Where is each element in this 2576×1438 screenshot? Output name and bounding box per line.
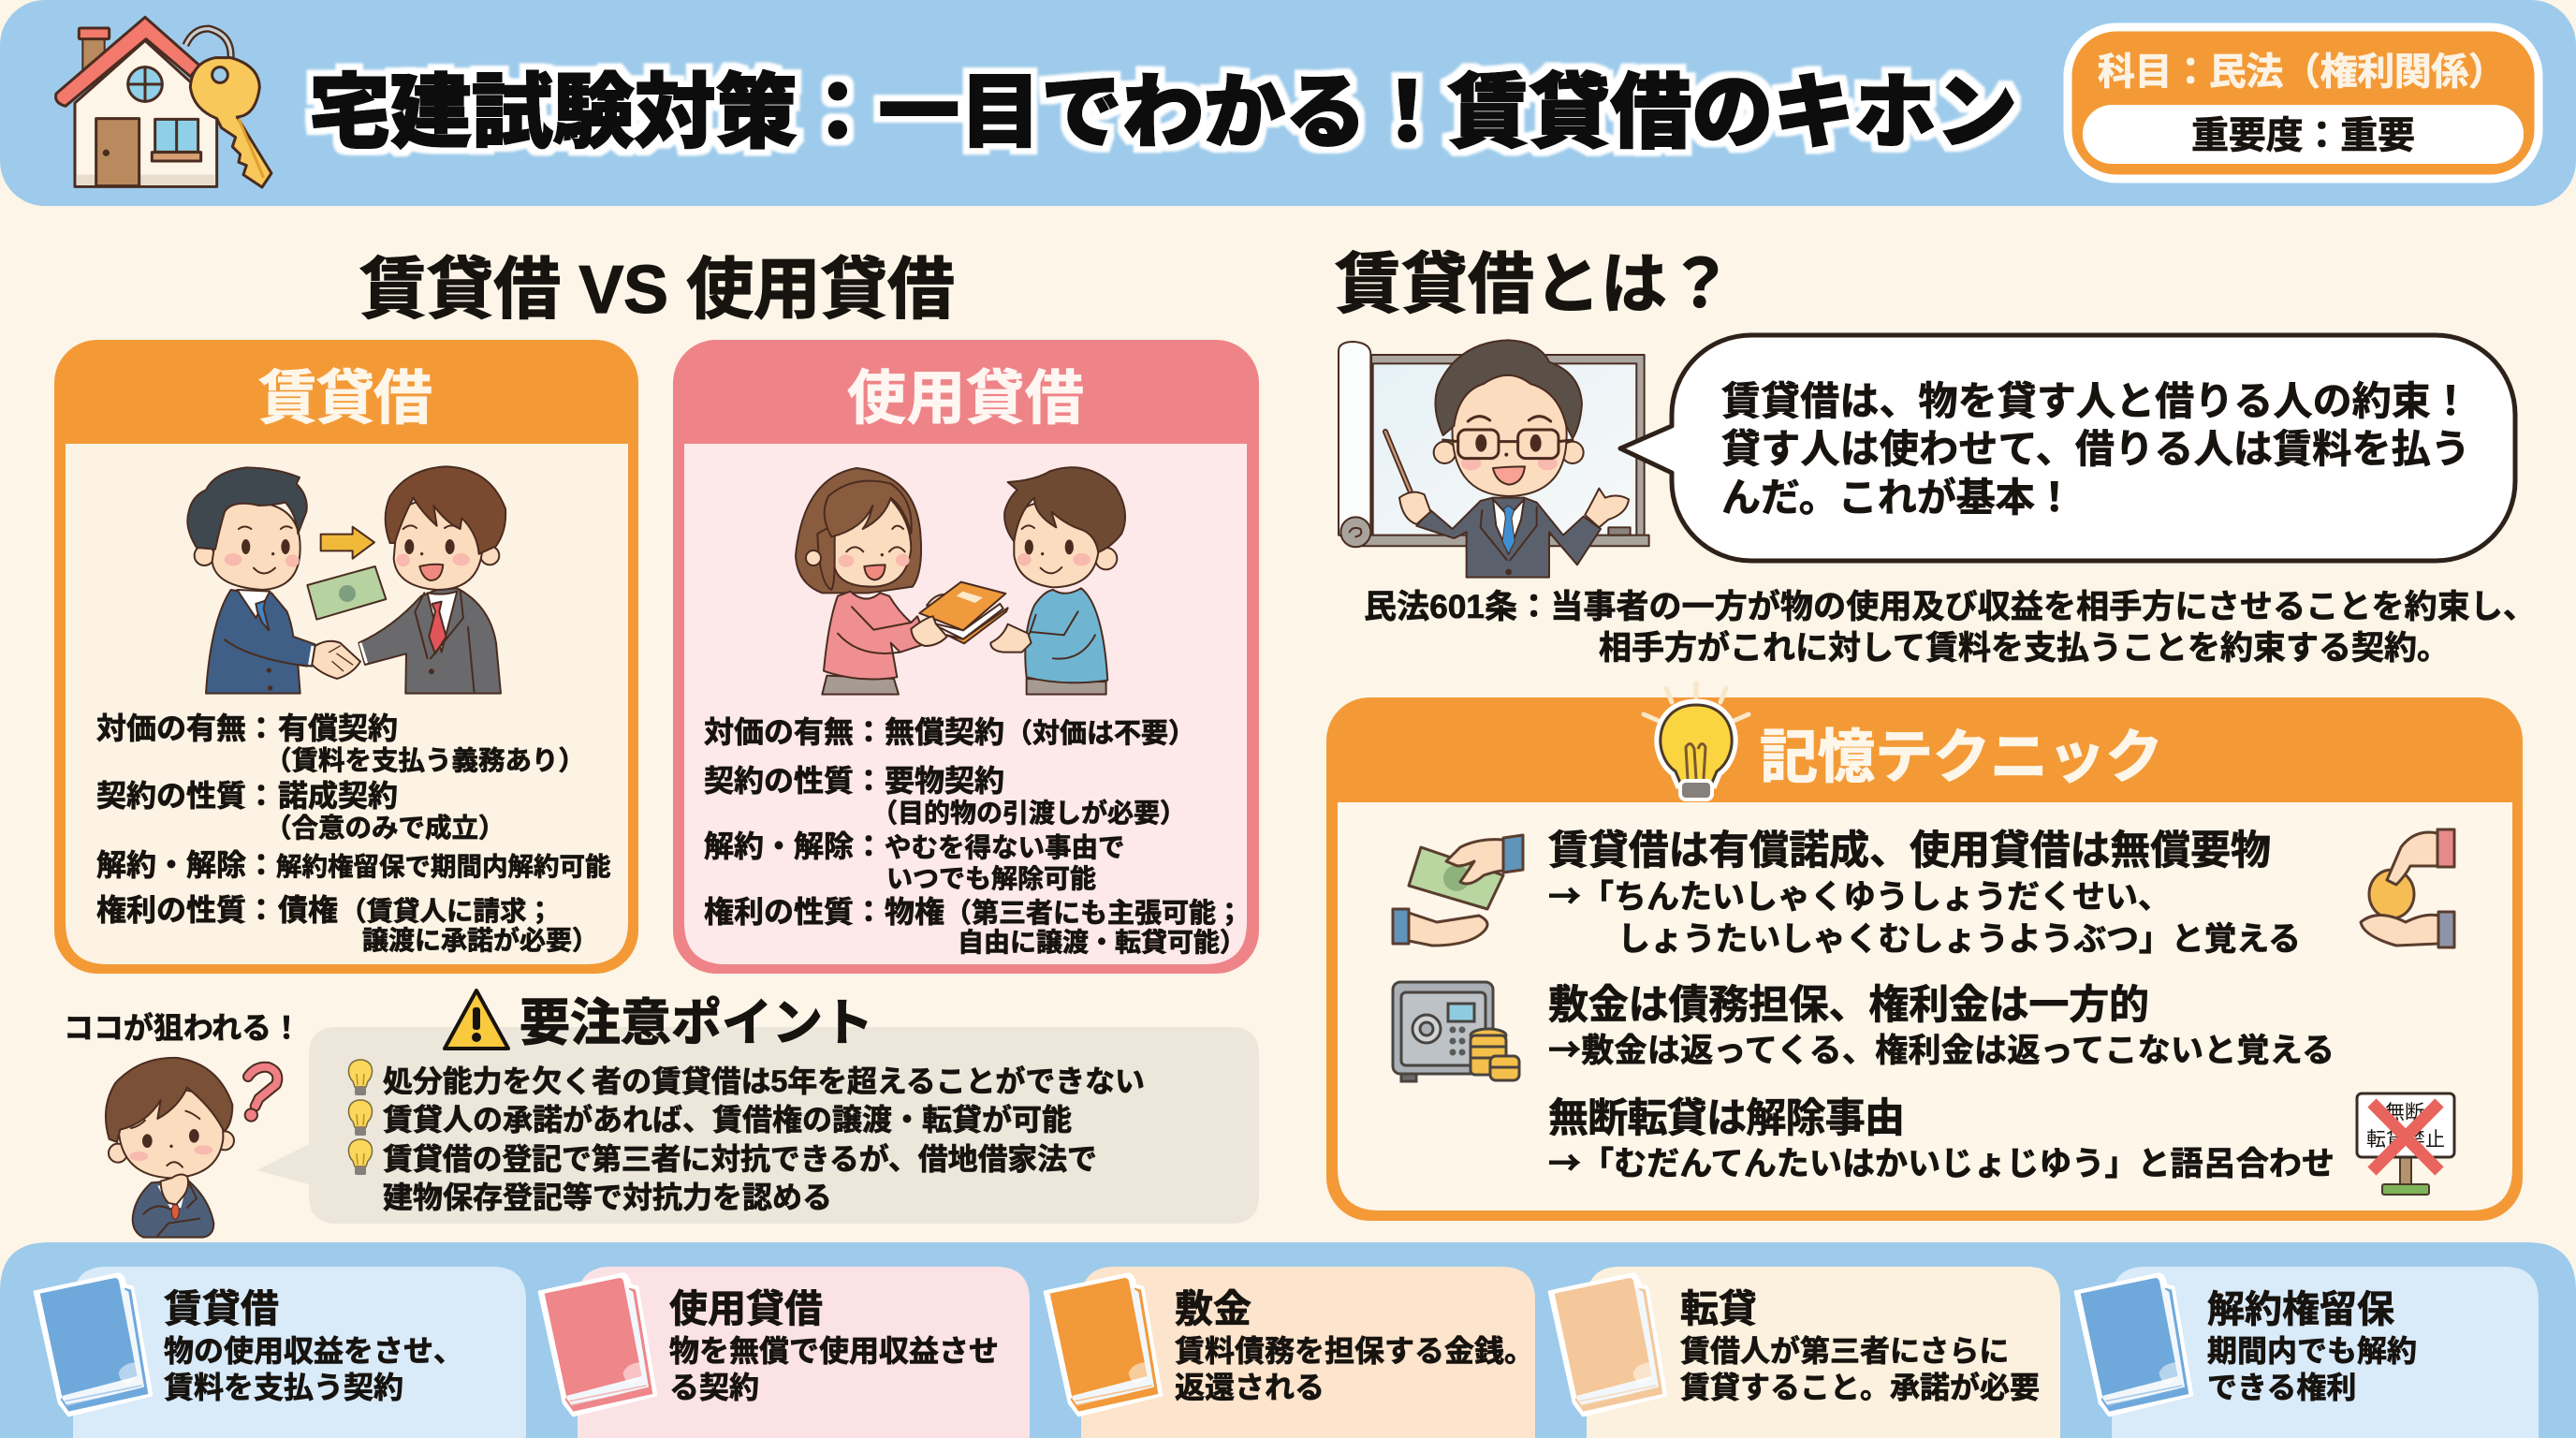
card facts: 契約の性質：: [96, 779, 276, 813]
icon: coin handover: [2361, 829, 2454, 947]
glossary card: 敷金: [1045, 1267, 1535, 1438]
technique lines: 無断転貸は解除事由: [1548, 1096, 1905, 1141]
card facts: （賃貸人に請求；: [340, 897, 553, 927]
card facts: （第三者にも主張可能；: [944, 898, 1243, 929]
card facts: 要物契約: [885, 764, 1004, 798]
glossary card: 賃貸借: 賃料を支払う契約: [164, 1371, 403, 1404]
card facts: 物権: [885, 895, 944, 929]
card facts: 対価の有無：: [704, 715, 884, 749]
speech bubble: 賃貸借は、物を貸す人と借りる人の約束！: [1721, 379, 2470, 423]
glossary band: [0, 1242, 2576, 1438]
glossary card: 転貸: 賃貸すること。承諾が必要: [1680, 1371, 2040, 1404]
glossary card: 使用貸借: る契約: [669, 1371, 759, 1404]
icon: cash handover: [1393, 835, 1523, 946]
panel: 使用貸借 card: [673, 340, 1259, 974]
civil code article 601: 民法601条：当事者の一方が物の使用及び収益を相手方にさせることを約束し、: [1364, 589, 2536, 625]
glossary card: 敷金: 賃料債務を担保する金銭。: [1175, 1334, 1534, 1368]
card facts: いつでも解除可能: [886, 864, 1096, 893]
panel: memory technique: [1326, 683, 2523, 1221]
card facts: 権利の性質：: [704, 895, 884, 929]
panel: caution points: [64, 990, 1259, 1238]
panel heading: 記憶テクニック: [1760, 726, 2163, 790]
card facts: 債権: [278, 893, 338, 927]
icon: safe with coins: [1393, 982, 1519, 1081]
card facts: 解約・解除：: [96, 848, 276, 882]
speech bubble: [1620, 335, 2515, 561]
card facts: （合意のみで成立）: [265, 814, 505, 844]
caution bullets: 処分能力を欠く者の賃貸借は5年を超えることができない: [383, 1064, 1145, 1098]
card facts: [96, 712, 610, 955]
glossary card: 解約権留保: 期間内でも解約: [2207, 1334, 2417, 1368]
icon: warning triangle: [445, 990, 508, 1049]
badge: subject and importance: [2068, 27, 2539, 179]
caution bullets: 建物保存登記等で対抗力を認める: [383, 1181, 832, 1214]
card facts: 譲渡に承諾が必要）: [362, 925, 598, 955]
card facts: 諾成契約: [278, 779, 398, 813]
caution bullets: 賃貸借の登記で第三者に対抗できるが、借地借家法で: [383, 1142, 1097, 1176]
caution bullets: 賃貸人の承諾があれば、賃借権の譲渡・転貸が可能: [383, 1103, 1072, 1137]
card facts: 自由に譲渡・転貸可能）: [958, 928, 1246, 957]
icon: no-sublease sign: 無断: [2385, 1102, 2424, 1123]
glossary card: 使用貸借: 物を無償で使用収益させ: [669, 1334, 999, 1368]
title: 宅建試験対策：一目でわかる！賃貸借のキホン: [309, 67, 2017, 158]
civil code article 601: 相手方がこれに対して賃料を支払うことを約束する契約。: [1599, 630, 2450, 667]
technique lines: →「むだんてんたいはかいじょじゆう」と語呂合わせ: [1548, 1137, 2334, 1185]
card facts: （賃料を支払う義務あり）: [265, 746, 585, 776]
card facts: （対価は不要）: [1005, 718, 1195, 749]
glossary card: 転貸: 賃借人が第三者にさらに: [1680, 1334, 2009, 1368]
caution heading: 要注意ポイント: [520, 995, 873, 1051]
technique lines: [1548, 829, 2334, 1185]
card facts: 対価の有無：: [96, 712, 276, 745]
glossary card: 転貸: 転貸: [1680, 1287, 1757, 1330]
glossary card: 敷金: 返還される: [1175, 1371, 1325, 1404]
speech bubble: んだ。これが基本！: [1721, 476, 2074, 520]
glossary card: 解約権留保: [2075, 1267, 2539, 1438]
glossary card: 転貸: [1549, 1267, 2060, 1438]
panel: 賃貸借 card: [54, 340, 638, 974]
badge: subject and importance: 科目：民法（権利関係）: [2098, 51, 2506, 93]
technique lines: 賃貸借は有償諾成、使用貸借は無償要物: [1548, 829, 2271, 873]
character: worried student: [106, 1058, 277, 1238]
card heading: 使用貸借: [847, 366, 1084, 432]
technique lines: しょうたいしゃくむしょうようぶつ」と覚える: [1617, 921, 2301, 958]
glossary card: 敷金: 敷金: [1175, 1287, 1251, 1330]
icon: house with key: [56, 17, 271, 187]
card heading: 賃貸借: [258, 366, 432, 432]
card facts: やむを得ない事由で: [885, 833, 1125, 863]
technique lines: →「ちんたいしゃくゆうしょうだくせい、: [1548, 871, 2171, 918]
card facts: [704, 715, 1246, 957]
glossary card: 賃貸借: 賃貸借: [164, 1287, 279, 1330]
icon: no-sublease sign: 転貸禁止: [2366, 1129, 2445, 1151]
label: target: ココが狙われる！: [64, 1011, 301, 1045]
header band: [0, 0, 2576, 206]
badge: subject and importance: 重要度：重要: [2191, 115, 2415, 156]
card facts: （目的物の引渡しが必要）: [871, 798, 1186, 828]
icon: large light bulb: [1644, 683, 1749, 800]
icon: no-sublease sign: [2357, 1093, 2454, 1195]
heading: what is lease: 賃貸借とは？: [1335, 248, 1734, 322]
heading: comparison: 賃貸借 VS 使用貸借: [359, 253, 955, 328]
card facts: 解約・解除：: [704, 829, 884, 863]
card facts: 契約の性質：: [704, 764, 884, 798]
glossary card: 使用貸借: 使用貸借: [669, 1287, 823, 1330]
card facts: 有償契約: [278, 712, 398, 745]
glossary card: 使用貸借: [539, 1267, 1030, 1438]
glossary card: 賃貸借: [35, 1267, 526, 1438]
character: teacher at whiteboard: [1339, 340, 1649, 578]
technique lines: 敷金は債務担保、権利金は一方的: [1548, 983, 2149, 1028]
illustration: lending a book: [796, 467, 1125, 695]
civil code article 601: [1364, 589, 2536, 667]
speech bubble: 貸す人は使わせて、借りる人は賃料を払う: [1721, 427, 2470, 471]
card facts: 権利の性質：: [96, 893, 276, 927]
illustration: handshake with money: [187, 466, 505, 694]
glossary card: 賃貸借: 物の使用収益をさせ、: [164, 1334, 463, 1368]
card facts: 無償契約: [885, 715, 1004, 749]
glossary card: 解約権留保: 解約権留保: [2207, 1289, 2394, 1330]
caution bullets: [348, 1060, 1145, 1214]
technique lines: →敷金は返ってくる、権利金は返ってこないと覚える: [1548, 1024, 2334, 1072]
card facts: 解約権留保で期間内解約可能: [276, 852, 610, 881]
glossary card: 解約権留保: できる権利: [2207, 1371, 2356, 1404]
